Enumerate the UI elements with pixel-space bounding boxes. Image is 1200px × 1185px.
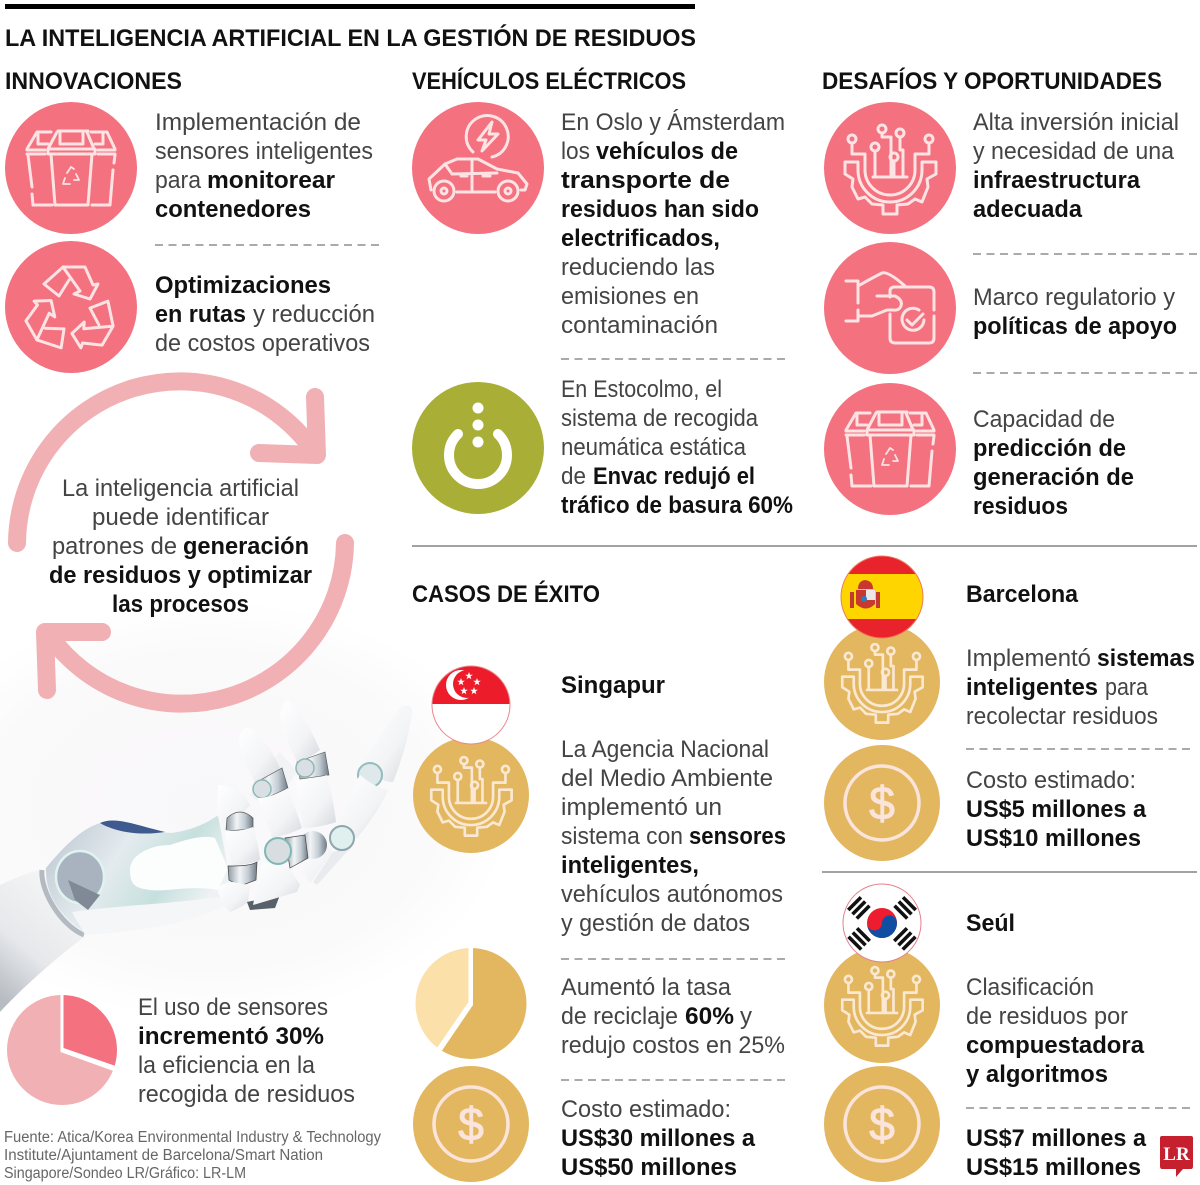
text: costo singapur: Costo estimado: — [561, 1096, 731, 1123]
source: Fuente: Atica/Korea Environmental Industry & Technology — [4, 1129, 381, 1146]
text: centro del ciclo: generación — [183, 533, 309, 560]
icon: recogida neumatica — [412, 382, 544, 514]
text: sensores 30%: incrementó 30% — [138, 1023, 324, 1050]
text: sensores: monitorear — [207, 167, 335, 194]
text: estocolmo: de — [561, 463, 586, 490]
text: agencia nacional: del Medio Ambiente — [561, 765, 773, 792]
icon: auto electrico — [412, 102, 544, 234]
text: oslo: vehículos de — [596, 138, 738, 165]
text: oslo: reduciendo las — [561, 254, 715, 281]
text: prediccion — [973, 406, 1134, 520]
text: agencia nacional: La Agencia Nacional — [561, 736, 769, 763]
text: prediccion: Capacidad de — [973, 406, 1115, 433]
panel: barcelona — [824, 556, 1195, 861]
text: costo barcelona — [966, 767, 1146, 852]
text: estocolmo: neumática estática — [561, 434, 746, 461]
heading: casos de exito: CASOS DE ÉXITO — [412, 580, 600, 608]
icon: reciclaje — [5, 241, 137, 373]
text: costo seul — [966, 1125, 1146, 1181]
text: costo barcelona: Costo estimado: — [966, 767, 1136, 794]
title: LA INTELIGENCIA ARTIFICIAL EN LA GESTIÓN DE RESIDUOS — [5, 24, 696, 52]
text: costo barcelona: US$5 millones a — [966, 796, 1146, 823]
text: costo singapur: US$50 millones — [561, 1154, 737, 1181]
text: clasificacion: Clasificación — [966, 974, 1094, 1001]
text: barcelona: Barcelona — [966, 581, 1078, 608]
text: agencia nacional: sensores — [689, 823, 786, 850]
text: sensores 30%: la eficiencia en la — [138, 1052, 315, 1079]
text: sensores 30% — [138, 994, 355, 1108]
text: costo seul: US$15 millones — [966, 1154, 1141, 1181]
text: sensores: Implementación de — [155, 109, 361, 136]
text: agencia nacional: sistema con — [561, 823, 683, 850]
text: reciclaje: de reciclaje — [561, 1003, 678, 1030]
text: sistemas inteligentes — [966, 645, 1195, 730]
text: oslo: contaminación — [561, 312, 718, 339]
panel: vehiculos electricos — [412, 67, 793, 519]
text: sensores — [155, 109, 373, 223]
text: sensores 30%: El uso de sensores — [138, 994, 328, 1021]
text: seul: Seúl — [966, 910, 1015, 937]
icon: contenedores — [5, 102, 137, 234]
text: inversion: infraestructura — [973, 167, 1140, 194]
robot hand illustration — [0, 700, 412, 1012]
text: sistemas inteligentes: sistemas — [1097, 645, 1195, 672]
text: centro del ciclo: puede identificar — [92, 504, 269, 531]
text: costo barcelona: US$10 millones — [966, 825, 1141, 852]
circular arrows — [17, 381, 345, 704]
text: agencia nacional: implementó un — [561, 794, 722, 821]
icon: bandera espana — [841, 556, 923, 638]
text: sistemas inteligentes: inteligentes — [966, 674, 1098, 701]
text: inversion: adecuada — [973, 196, 1082, 223]
text: sensores: para — [155, 167, 201, 194]
text: sistemas inteligentes: Implementó — [966, 645, 1091, 672]
heading: desafios: DESAFÍOS Y OPORTUNIDADES — [822, 67, 1162, 95]
text: sistemas inteligentes: recolectar residuos — [966, 703, 1158, 730]
text: sistemas inteligentes: para — [1105, 674, 1148, 701]
text: prediccion: predicción de — [973, 435, 1126, 462]
text: estocolmo — [561, 376, 793, 519]
source: Singapore/Sondeo LR/Gráfico: LR-LM — [4, 1165, 246, 1182]
icon: engranaje dorado singapur — [413, 737, 529, 853]
text: rutas: de costos operativos — [155, 330, 370, 357]
text: oslo: electrificados, — [561, 225, 720, 252]
heading: vehiculos: VEHÍCULOS ELÉCTRICOS — [412, 67, 686, 95]
text: reciclaje: Aumentó la tasa — [561, 974, 731, 1001]
text: singapur: Singapur — [561, 672, 665, 699]
text: clasificacion: y algoritmos — [966, 1061, 1108, 1088]
text: sensores: contenedores — [155, 196, 311, 223]
text: oslo — [561, 109, 785, 339]
text: costo singapur — [561, 1096, 755, 1181]
icon: bandera corea — [843, 884, 921, 962]
text: clasificacion — [966, 974, 1144, 1088]
text: agencia nacional: y gestión de datos — [561, 910, 750, 937]
text: costo singapur: US$30 millones a — [561, 1125, 755, 1152]
background glow behind robot hand — [0, 600, 510, 1020]
source: Institute/Ajuntament de Barcelona/Smart Nation — [4, 1147, 323, 1164]
text: agencia nacional — [561, 736, 786, 937]
icon: dolar barcelona: $ — [869, 777, 895, 829]
text: agencia nacional: vehículos autónomos — [561, 881, 783, 908]
icon: engranaje dorado seul — [824, 947, 940, 1063]
text: marco regulatorio — [973, 284, 1177, 340]
text: estocolmo: tráfico de basura 60% — [561, 492, 793, 519]
text: centro del ciclo: de residuos y optimizar — [49, 562, 312, 589]
text: rutas — [155, 272, 375, 357]
text: estocolmo: En Estocolmo, el — [561, 376, 722, 403]
icon: dolar singapur — [413, 1066, 529, 1182]
text: rutas: Optimizaciones — [155, 272, 331, 299]
text: oslo: emisiones en — [561, 283, 699, 310]
text: reciclaje — [561, 974, 785, 1059]
text: prediccion: residuos — [973, 493, 1068, 520]
text: prediccion: generación de — [973, 464, 1134, 491]
text: oslo: los — [561, 138, 590, 165]
text: estocolmo: sistema de recogida — [561, 405, 758, 432]
text: inversion — [973, 109, 1179, 223]
text: clasificacion: compuestadora — [966, 1032, 1144, 1059]
icon: engranaje dorado barcelona — [824, 624, 940, 740]
text: centro del ciclo: patrones de — [52, 533, 177, 560]
text: agencia nacional: inteligentes, — [561, 852, 699, 879]
icon: dolar seul — [824, 1066, 940, 1182]
source — [4, 1129, 381, 1182]
text: reciclaje: 60% — [685, 1003, 734, 1030]
text: oslo: residuos han sido — [561, 196, 759, 223]
text: centro del ciclo: La inteligencia artificial — [62, 475, 299, 502]
text: inversion: Alta inversión inicial — [973, 109, 1179, 136]
icon: dolar seul: $ — [869, 1098, 895, 1150]
text: costo seul: US$7 millones a — [966, 1125, 1146, 1152]
icon: engranaje circuito — [824, 102, 956, 234]
panel: casos de exito, singapur — [412, 580, 790, 1182]
icon: contenedores — [824, 383, 956, 515]
text: clasificacion: de residuos por — [966, 1003, 1128, 1030]
pie chart: reciclaje 60% — [416, 948, 526, 1059]
heading: innovaciones: INNOVACIONES — [5, 68, 182, 95]
text: sensores: sensores inteligentes — [155, 138, 373, 165]
icon: bandera singapur — [430, 665, 512, 746]
icon: dolar singapur: $ — [458, 1098, 484, 1150]
pie chart: 30% — [7, 995, 117, 1105]
logo: LR — [1160, 1136, 1193, 1177]
icon: mano con documento — [824, 242, 956, 374]
text: centro del ciclo — [49, 475, 312, 618]
text: inversion: y necesidad de una — [973, 138, 1174, 165]
panel: seul — [824, 884, 1195, 1182]
text: sensores 30%: recogida de residuos — [138, 1081, 355, 1108]
text: estocolmo: Envac redujó el — [593, 463, 755, 490]
panel: innovaciones — [5, 68, 382, 373]
text: marco regulatorio: Marco regulatorio y — [973, 284, 1176, 311]
text: centro del ciclo: las procesos — [112, 591, 249, 618]
text: marco regulatorio: políticas de apoyo — [973, 313, 1177, 340]
title — [5, 4, 696, 52]
text: rutas: en rutas — [155, 301, 246, 328]
text: rutas: y reducción — [253, 301, 375, 328]
text: reciclaje: y — [740, 1003, 753, 1030]
logo: LR: LR — [1163, 1144, 1190, 1165]
text: reciclaje: redujo costos en 25% — [561, 1032, 785, 1059]
text: oslo: transporte de — [561, 167, 730, 194]
icon: dolar barcelona — [824, 745, 940, 861]
text: oslo: En Oslo y Ámsterdam — [561, 109, 785, 136]
panel: desafios y oportunidades — [822, 67, 1200, 520]
